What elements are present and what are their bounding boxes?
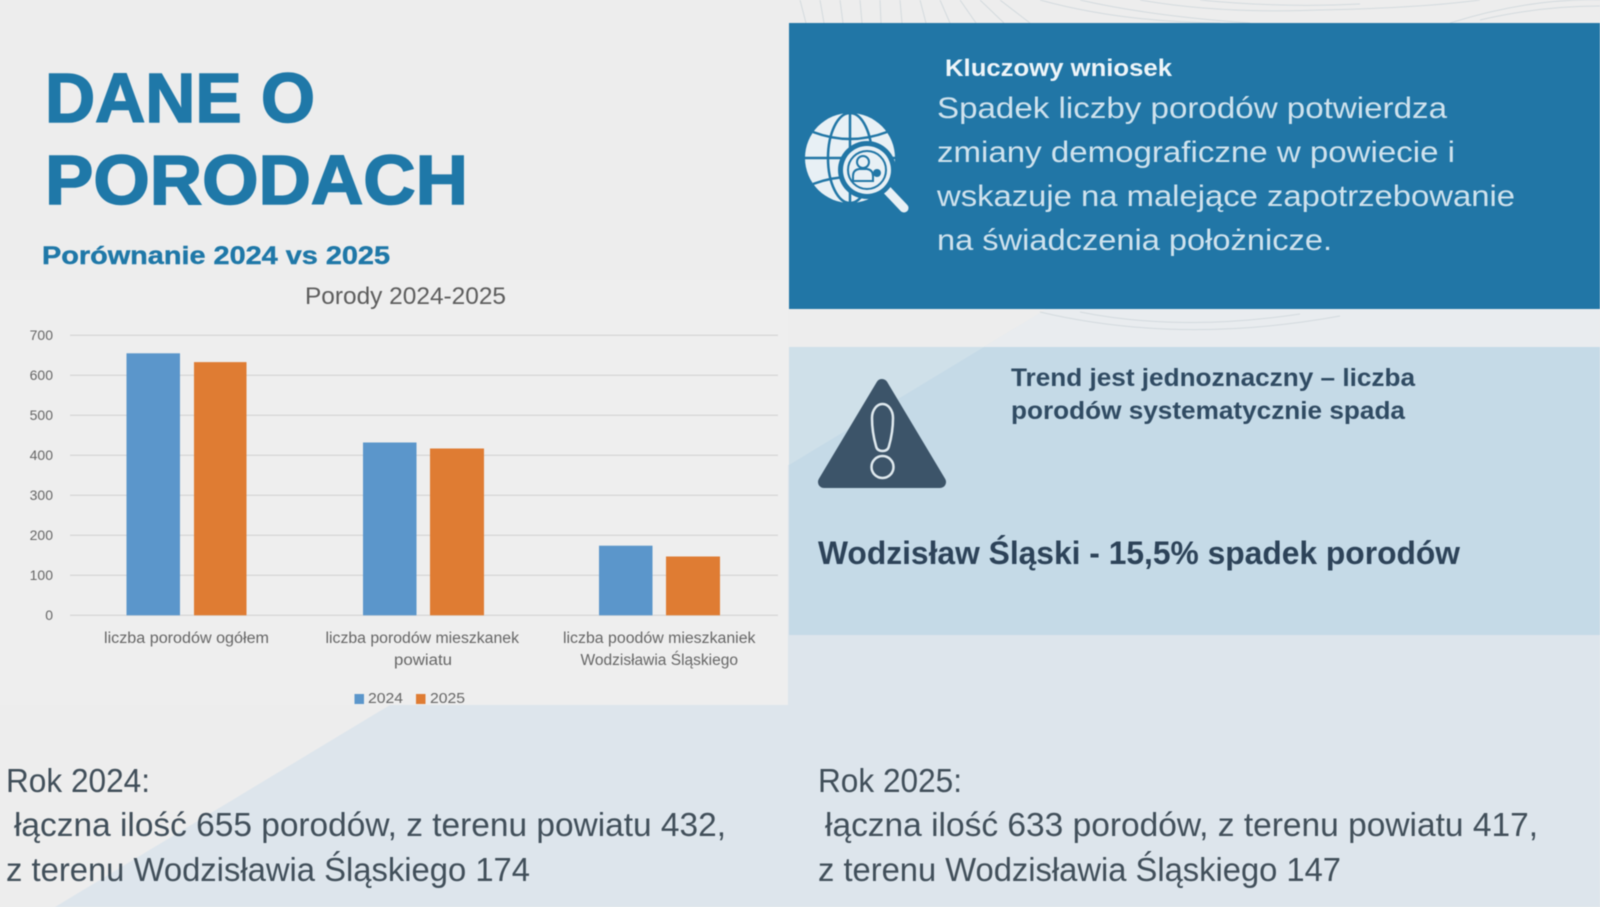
conclusion text — [936, 92, 1515, 257]
category labels: liczba porodów ogółem — [104, 630, 269, 647]
text block: year 2024: z terenu Wodzisławia Śląskiego 174 — [6, 850, 530, 888]
gridlines and y axis: 200 — [30, 527, 53, 543]
conclusion text: zmiany demograficzne w powiecie i — [937, 136, 1455, 169]
text block: year 2025: Rok 2025: — [818, 762, 962, 799]
gridlines and y axis: 500 — [30, 407, 53, 423]
title: PORODACH — [45, 141, 468, 219]
category labels — [104, 630, 756, 669]
text block: year 2024: Rok 2024: — [6, 762, 150, 799]
text block: year 2024: łączna ilość 655 porodów, z terenu powiatu 432, — [14, 806, 726, 843]
trend statement: Trend jest jednoznaczny – liczba — [1011, 364, 1416, 392]
text block: year 2025: łączna ilość 633 porodów, z terenu powiatu 417, — [825, 806, 1538, 843]
legend: 2024 — [368, 691, 403, 707]
conclusion text: na świadczenia położnicze. — [937, 224, 1332, 257]
text block: year 2024 — [6, 762, 726, 888]
gridlines and y axis: 0 — [45, 607, 53, 623]
panel: trend warning — [789, 347, 1600, 635]
bar chart panel — [0, 280, 788, 707]
category labels: Wodzisławia Śląskiego — [580, 651, 738, 669]
conclusion text: wskazuje na malejące zapotrzebowanie — [936, 180, 1515, 213]
title — [45, 59, 468, 219]
gridlines and y axis: 700 — [30, 327, 53, 343]
text block: year 2025 — [818, 762, 1538, 888]
Wodzisław decline callout: Wodzisław Śląski - 15,5% spadek porodów — [818, 535, 1460, 571]
category labels: powiatu — [394, 652, 452, 669]
icon: globe with magnifier — [805, 113, 904, 208]
gridlines and y axis: 300 — [30, 487, 53, 503]
gridlines and y axis: 400 — [30, 447, 53, 463]
chart title: Porody 2024-2025 — [305, 283, 506, 310]
title: DANE O — [45, 59, 315, 137]
heading: key conclusion: Kluczowy wniosek — [945, 55, 1173, 82]
trend statement — [1011, 364, 1416, 425]
icon: warning triangle — [824, 385, 940, 482]
bars: Wodzisław residents — [599, 546, 720, 615]
bars: total births — [126, 353, 246, 615]
legend: 2025 — [430, 691, 465, 707]
category labels: liczba porodów mieszkanek — [326, 630, 519, 647]
gridlines and y axis: 100 — [30, 567, 53, 583]
legend — [354, 691, 465, 707]
panel: key conclusion — [789, 23, 1600, 309]
trend statement: porodów systematycznie spada — [1011, 397, 1406, 425]
bars: county residents — [363, 442, 484, 615]
gridlines and y axis: 600 — [30, 367, 53, 383]
subtitle: Porównanie 2024 vs 2025 — [42, 242, 390, 270]
gridlines and y axis — [30, 327, 778, 623]
text block: year 2025: z terenu Wodzisławia Śląskiego 147 — [818, 850, 1341, 888]
conclusion text: Spadek liczby porodów potwierdza — [937, 92, 1447, 125]
category labels: liczba poodów mieszkaniek — [563, 630, 756, 647]
